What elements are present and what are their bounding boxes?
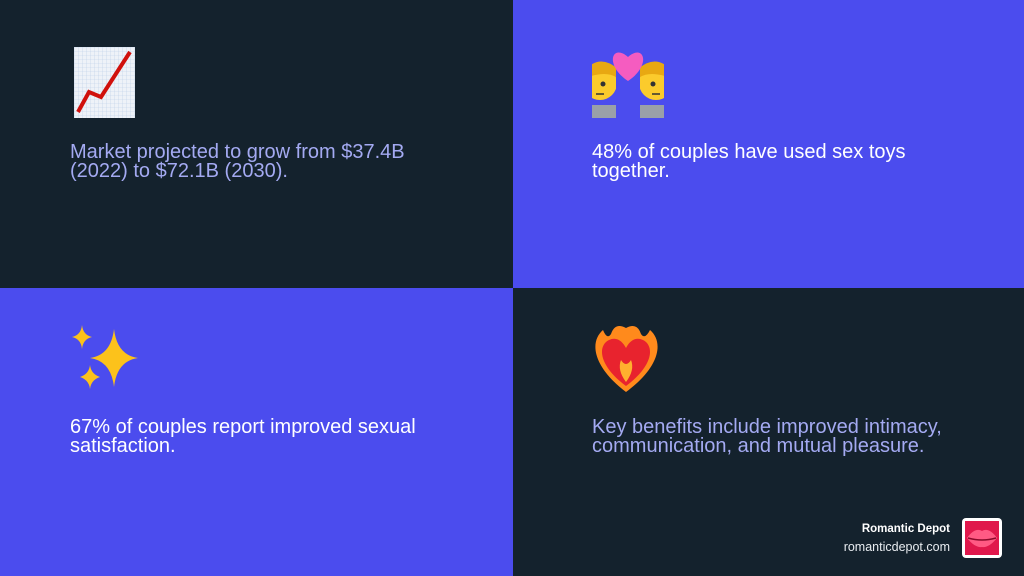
text: market [70, 141, 405, 182]
panel: market growth [0, 0, 513, 288]
icon: heart on fire [595, 326, 658, 392]
text: couples [592, 141, 906, 182]
logo: Romantic Depot: romanticdepot.com [844, 540, 950, 554]
text: market: (2022) to $72.1B (2030). [70, 160, 288, 182]
text: benefits [592, 416, 942, 456]
text: benefits: Key benefits include improved intimacy, [592, 416, 942, 438]
panel: benefits [513, 288, 1024, 576]
panel: couples used toys [513, 0, 1024, 288]
text: couples: 48% of couples have used sex toys [592, 141, 906, 163]
panel: satisfaction [0, 288, 513, 576]
text: market: Market projected to grow from $37.4B [70, 141, 405, 163]
text: couples: together. [592, 160, 670, 182]
text: benefits: communication, and mutual pleasure. [592, 434, 924, 456]
icon: couple with heart [592, 52, 664, 118]
icon: sparkles [72, 325, 138, 389]
text: satisfaction [70, 416, 416, 456]
icon: chart [74, 47, 135, 118]
text: satisfaction: 67% of couples report improved sexual [70, 416, 416, 438]
logo: Romantic Depot [844, 518, 1002, 558]
text: satisfaction: satisfaction. [70, 434, 176, 456]
logo: Romantic Depot: Romantic Depot [862, 523, 950, 535]
